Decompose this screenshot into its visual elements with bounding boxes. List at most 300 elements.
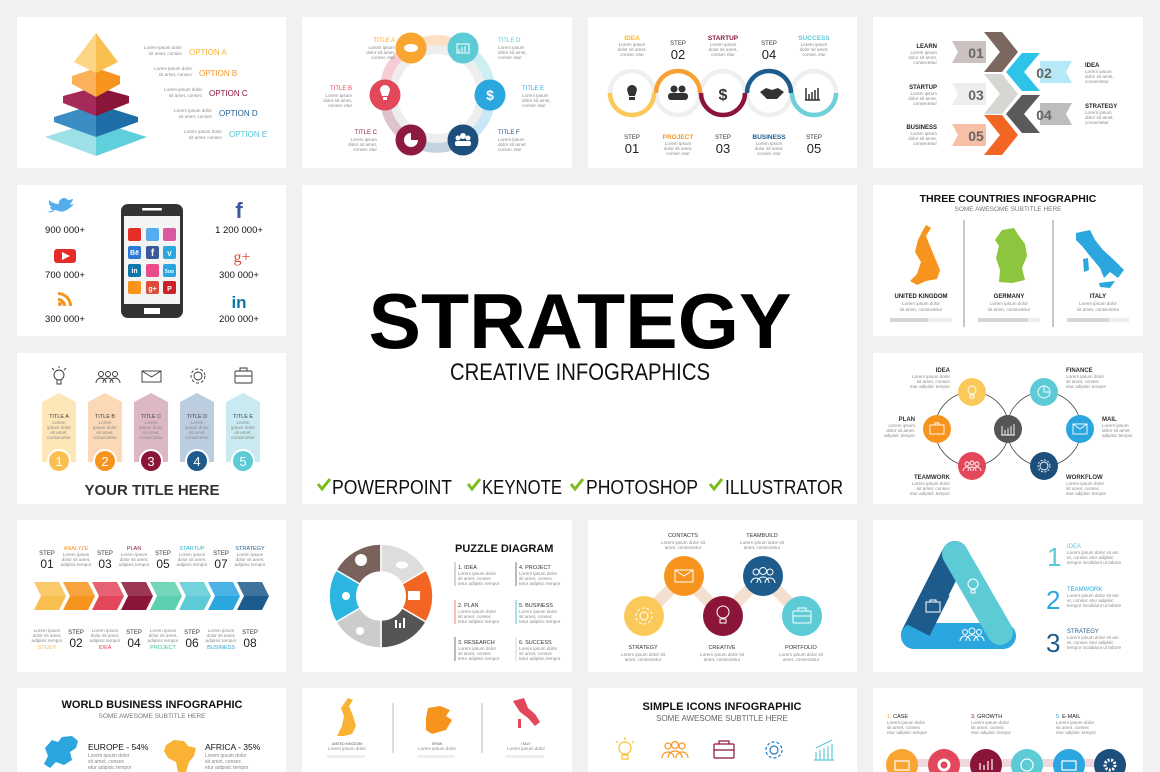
country labels: Lorem ipsum dolor — [1079, 301, 1117, 306]
puzzle legend: sit amet, consec — [519, 651, 553, 656]
line icons — [52, 366, 252, 384]
step labels: consec etur — [802, 52, 826, 57]
option labels: Lorem ipsum dolor — [184, 129, 222, 134]
subtitle: CREATIVE INFOGRAPHICS — [450, 359, 710, 386]
timeline labels: 3. GROWTH — [971, 714, 1002, 720]
social stats right: g+ — [233, 249, 251, 266]
numbered list: tempor incididunt ut labore — [1067, 603, 1122, 608]
step labels: Lorem ipsum — [121, 552, 147, 557]
puzzle legend: tetur adipisic tempor — [458, 619, 500, 624]
step labels: dolor sit amet, — [800, 47, 828, 52]
circle titles: consec etur — [498, 55, 522, 60]
pills: sit amet, — [188, 430, 206, 435]
pills: ipsum dolor — [231, 425, 255, 430]
country labels — [890, 294, 1129, 322]
pills: Lorem — [190, 420, 204, 425]
pills: 2 — [101, 454, 109, 469]
step labels: Lorem ipsum — [179, 552, 205, 557]
network labels: dolor sit amet, — [886, 428, 915, 433]
circle titles: consec etur — [498, 147, 522, 152]
panel: pyramid — [17, 17, 286, 168]
numbered list: IDEA — [1067, 544, 1081, 550]
chain labels — [621, 533, 824, 662]
pills: sit amet, — [50, 430, 68, 435]
step labels: 03 — [716, 141, 730, 156]
step labels: BUSINESS — [207, 645, 235, 651]
panel: simple icons — [588, 688, 857, 772]
step labels: 05 — [156, 557, 170, 571]
step labels: dolor sit amet, — [664, 146, 692, 151]
network labels: Lorem ipsum dolor — [1066, 481, 1105, 486]
pills: TITLE E — [233, 414, 253, 420]
step labels — [32, 546, 266, 651]
circle titles: dolor sit amet, — [348, 142, 377, 147]
chevron labels: dolor sit amet, — [1085, 115, 1114, 120]
phone — [121, 204, 183, 318]
timeline circles — [886, 749, 1126, 772]
puzzle legend: sit amet, consec — [519, 576, 553, 581]
chain labels: TEAMBUILD — [746, 533, 778, 539]
panel: country maps — [302, 688, 572, 772]
step labels: IDEA — [624, 35, 640, 42]
step labels: STARTUP — [708, 35, 739, 42]
ring diagram: $ — [486, 87, 494, 103]
chevron labels: Lorem ipsum — [910, 131, 937, 136]
pills: Lorem — [144, 420, 158, 425]
option labels: OPTION E — [229, 130, 267, 139]
puzzle legend: Lorem ipsum dolor — [458, 571, 497, 576]
circle titles: TITLE C — [355, 130, 378, 136]
step labels: STEP — [155, 551, 171, 557]
panel: main title — [302, 185, 857, 504]
chevron labels: dolor sit amet, — [1085, 74, 1114, 79]
heading: SIMPLE ICONS INFOGRAPHIC — [643, 701, 802, 713]
phone: 5oo — [165, 269, 174, 275]
europe stat: EUROPE - 54% — [88, 742, 149, 752]
step labels: STEP — [126, 630, 142, 636]
numbered list: Lorem ipsum dolor sit am — [1067, 550, 1119, 555]
pills: Lorem — [236, 420, 250, 425]
phone: Bē — [130, 250, 139, 257]
phone: g+ — [148, 286, 157, 293]
circle titles: TITLE A — [373, 38, 395, 44]
pills: consectetur — [185, 435, 209, 440]
pills: TITLE B — [95, 414, 115, 420]
chevron labels: dolor sit amet, — [908, 136, 937, 141]
puzzle legend — [455, 543, 561, 661]
circle titles: Lorem ipsum — [350, 137, 377, 142]
panel: social phone — [17, 185, 286, 336]
chevron labels: consectetur — [913, 141, 937, 146]
pills: ipsum dolor — [47, 425, 71, 430]
puzzle legend: 6. SUCCESS — [519, 640, 552, 646]
africa stat: Lorem ipsum dolor — [205, 753, 247, 759]
circle titles: Lorem ipsum — [368, 45, 395, 50]
social stats left — [45, 198, 85, 325]
europe stat: etur adipisic tempor — [88, 765, 132, 771]
chevron labels: BUSINESS — [906, 125, 937, 131]
step labels: dolor sit amet, — [62, 557, 90, 562]
chevron labels: consectetur — [913, 60, 937, 65]
option labels: OPTION B — [199, 69, 237, 78]
panel: three countries: SOME AWESOME SUBTITLE HERE — [954, 206, 1062, 213]
step labels: dolor sit amet, — [178, 557, 206, 562]
step labels: 01 — [625, 141, 639, 156]
numbered list: et, consec etur adipisic — [1067, 640, 1114, 645]
puzzle legend: Lorem ipsum dolor — [519, 571, 558, 576]
social stats right: 300 000+ — [219, 270, 259, 281]
network labels: sit amet, consec — [1066, 379, 1100, 384]
network labels: adipisic tempor — [1102, 433, 1133, 438]
option labels: OPTION C — [209, 89, 248, 98]
step labels: adipisic tempor — [177, 562, 208, 567]
puzzle legend: tetur adipisic tempor — [519, 619, 561, 624]
step labels: adipisic tempor — [148, 638, 179, 643]
country labels: Lorem ipsum dolor — [902, 301, 940, 306]
pills: consectetur — [139, 435, 163, 440]
step labels: dolor sit amet, — [91, 633, 119, 638]
network labels: sit amet, consec — [1066, 486, 1100, 491]
timeline labels: etur adipisic tempor — [971, 730, 1012, 735]
wave icons — [627, 85, 820, 104]
chain labels: amet, consectetur — [704, 657, 741, 662]
step labels: Lorem ipsum — [150, 628, 176, 633]
social stats right: 200 000+ — [219, 314, 259, 325]
step labels: dolor sit amet, — [207, 633, 235, 638]
chevron labels: dolor sit amet, — [908, 96, 937, 101]
puzzle ring — [329, 544, 433, 648]
option labels — [144, 45, 267, 140]
circle titles: Lorem ipsum — [325, 93, 352, 98]
circle titles: TITLE F — [498, 130, 520, 136]
step labels: dolor sit amet, — [709, 47, 737, 52]
chevron labels: IDEA — [1085, 63, 1100, 69]
chevron labels: Lorem ipsum — [1085, 110, 1112, 115]
circle titles: consec etur — [371, 55, 395, 60]
step labels: STEP — [715, 135, 731, 141]
circle network — [923, 378, 1094, 480]
puzzle legend: tetur adipisic tempor — [458, 581, 500, 586]
step labels: STEP — [184, 630, 200, 636]
puzzle legend: 2. PLAN — [458, 603, 479, 609]
europe stat — [88, 742, 149, 771]
network labels: MAIL — [1102, 417, 1117, 423]
country labels: sit amet, consectetur — [988, 307, 1031, 312]
africa stat: sit amet, consec — [205, 759, 242, 765]
step labels: adipisic tempor — [61, 562, 92, 567]
timeline labels: Lorem ipsum dolor — [971, 720, 1010, 725]
panel: puzzle diagram — [302, 520, 572, 672]
panel: steps wave — [588, 17, 857, 168]
step labels: Lorem ipsum — [92, 628, 118, 633]
network labels: Lorem ipsum — [1102, 423, 1129, 428]
option labels: OPTION D — [219, 109, 258, 118]
circle titles: dolor sit amet, — [498, 50, 527, 55]
chain labels: Lorem ipsum dolor sit — [621, 652, 666, 657]
network labels: IDEA — [936, 368, 951, 374]
step labels: dolor sit amet, — [755, 146, 783, 151]
puzzle legend: PUZZLE DIAGRAM — [455, 543, 553, 555]
numbered list: et, consec etur adipisic — [1067, 555, 1114, 560]
numbered list — [1046, 542, 1122, 658]
pills: 4 — [193, 454, 201, 469]
country labels: Lorem ipsum dolor — [990, 301, 1028, 306]
step labels: adipisic tempor — [32, 638, 63, 643]
network labels: Lorem ipsum dolor — [1066, 374, 1105, 379]
map: italy — [513, 698, 540, 726]
step labels: consec etur — [666, 151, 690, 156]
social stats right: 1 200 000+ — [215, 225, 263, 236]
chevrons: 03 — [968, 87, 984, 103]
chain labels: CREATIVE — [708, 645, 736, 651]
phone: P — [167, 286, 172, 293]
puzzle legend: Lorem ipsum dolor — [458, 609, 497, 614]
option labels: Lorem ipsum dolor — [174, 108, 212, 113]
step labels: 06 — [185, 636, 199, 650]
step labels: Lorem ipsum — [619, 42, 645, 47]
numbered list: 2 — [1046, 585, 1060, 615]
option labels: Lorem ipsum dolor — [164, 87, 202, 92]
circle titles: consec etur — [522, 103, 546, 108]
step labels: STARTUP — [179, 546, 205, 552]
map labels: Lorem ipsum dolor — [328, 746, 366, 751]
network labels: PLAN — [899, 417, 915, 423]
panel: world business: SOME AWESOME SUBTITLE HERE — [98, 713, 206, 720]
chevrons: 04 — [1036, 107, 1052, 123]
step labels: Lorem ipsum — [801, 42, 827, 47]
map: uk — [910, 225, 940, 285]
chain labels: amet, consectetur — [665, 545, 702, 550]
step labels: IDEA — [99, 645, 112, 651]
circle titles: TITLE B — [330, 86, 352, 92]
step labels: 01 — [40, 557, 54, 571]
timeline labels: 5. E-MAIL — [1056, 714, 1080, 720]
option labels: Lorem ipsum dolor — [154, 66, 192, 71]
step labels: consec etur — [711, 52, 735, 57]
pills: sit amet, — [142, 430, 160, 435]
numbered list: 1 — [1047, 542, 1061, 572]
step labels: BUSINESS — [752, 134, 786, 141]
puzzle legend: sit amet, consec — [458, 651, 492, 656]
step labels: consec etur — [757, 151, 781, 156]
chevron labels — [906, 44, 1117, 146]
outline icons — [616, 737, 834, 760]
pills: TITLE C — [141, 414, 161, 420]
chevron labels: consectetur — [913, 101, 937, 106]
circle titles: dolor sit amet, — [522, 98, 551, 103]
option labels: sit amet, consec — [179, 114, 213, 119]
network labels: Lorem ipsum dolor — [912, 374, 950, 379]
chevrons — [952, 32, 1072, 155]
step labels: 04 — [127, 636, 141, 650]
country labels: GERMANY — [994, 294, 1024, 300]
step labels: Lorem ipsum — [208, 628, 234, 633]
puzzle legend: sit amet, consec — [519, 614, 553, 619]
network labels — [884, 368, 1133, 496]
step labels: STEP — [39, 551, 55, 557]
chain labels: amet, consectetur — [783, 657, 820, 662]
step labels: 07 — [214, 557, 228, 571]
phone: V — [167, 251, 172, 258]
numbered list: Lorem ipsum dolor sit am — [1067, 635, 1119, 640]
puzzle legend: 4. PROJECT — [519, 565, 551, 571]
step labels: dolor sit amet, — [33, 633, 61, 638]
chevron labels: Lorem ipsum — [910, 91, 937, 96]
chain labels: Lorem ipsum dolor sit — [740, 540, 785, 545]
chevron labels: dolor sit amet, — [908, 55, 937, 60]
africa stat: etur adipisic tempor — [205, 765, 249, 771]
numbered list: tempor incididunt ut labore — [1067, 645, 1122, 650]
step labels: 04 — [762, 47, 776, 62]
pills: 1 — [55, 454, 63, 469]
map: africa — [164, 740, 196, 772]
puzzle legend: sit amet, consec — [458, 614, 492, 619]
numbered list: et, consec etur adipisic — [1067, 598, 1114, 603]
chevrons: 05 — [968, 128, 984, 144]
step labels: Lorem ipsum — [63, 552, 89, 557]
title: STRATEGY — [368, 277, 792, 365]
network labels: dolor sit amet, — [1102, 428, 1131, 433]
network labels: sit amet, consec — [917, 379, 951, 384]
map labels — [327, 742, 545, 758]
puzzle legend: tetur adipisic tempor — [458, 656, 500, 661]
step labels: Lorem ipsum — [756, 141, 782, 146]
numbered list: 3 — [1046, 628, 1060, 658]
panel: chevron steps — [873, 17, 1143, 168]
network labels: WORKFLOW — [1066, 475, 1103, 481]
country labels: sit amet, consectetur — [900, 307, 943, 312]
chevrons: 02 — [1036, 65, 1052, 81]
social stats left: 900 000+ — [45, 225, 85, 236]
chain labels: Lorem ipsum dolor sit — [779, 652, 824, 657]
step labels: 08 — [243, 636, 257, 650]
timeline labels: etur adipisic tempor — [1056, 730, 1097, 735]
compatibility list — [318, 477, 843, 499]
circle titles: consec etur — [353, 147, 377, 152]
option labels: sit amet, consec — [149, 51, 183, 56]
map labels: ITALY — [521, 742, 531, 746]
panel: world business — [17, 688, 286, 772]
pills: Lorem — [98, 420, 112, 425]
compatibility list: ILLUSTRATOR — [725, 477, 843, 499]
circle titles: TITLE D — [498, 38, 521, 44]
step labels: PROJECT — [663, 134, 693, 141]
social stats right — [215, 198, 263, 325]
step labels: dolor sit amet, — [149, 633, 177, 638]
option labels: OPTION A — [189, 48, 227, 57]
numbered list: tempor incididunt ut labore — [1067, 560, 1122, 565]
step labels: dolor sit amet, — [236, 557, 264, 562]
map: spain — [426, 706, 452, 734]
panel: six circles — [302, 17, 572, 168]
pills: TITLE A — [49, 414, 69, 420]
triangle icons — [926, 579, 984, 641]
chain labels: CONTACTS — [668, 533, 698, 539]
timeline labels: Lorem ipsum dolor — [887, 720, 926, 725]
timeline labels: sit amet, consec — [971, 725, 1005, 730]
pills: 5 — [239, 454, 247, 469]
panel: triangle — [873, 520, 1143, 672]
map labels: SPAIN — [432, 742, 443, 746]
panel: title pills — [17, 353, 286, 504]
step labels: Lorem ipsum — [237, 552, 263, 557]
numbered list: TEAMWORK — [1067, 587, 1102, 593]
pills: ipsum dolor — [139, 425, 163, 430]
timeline labels: sit amet, consec — [887, 725, 921, 730]
chevron labels: consectetur — [1085, 79, 1109, 84]
step labels: STEP — [68, 630, 84, 636]
heading: THREE COUNTRIES INFOGRAPHIC — [920, 193, 1097, 205]
wave icons: $ — [719, 87, 728, 104]
social stats left: 700 000+ — [45, 270, 85, 281]
pills: TITLE D — [187, 414, 207, 420]
step labels: SUCCESS — [798, 35, 830, 42]
network labels: etur adipisic tempor — [1066, 491, 1107, 496]
arrow band — [34, 582, 270, 610]
chain labels: amet, consectetur — [625, 657, 662, 662]
step labels: 02 — [69, 636, 83, 650]
country labels: sit amet, consectetur — [1077, 307, 1120, 312]
africa stat: AFRICA - 35% — [205, 742, 261, 752]
puzzle legend: 3. RESEARCH — [458, 640, 495, 646]
step labels: STRATEGY — [235, 546, 265, 552]
step labels: STEP — [806, 135, 822, 141]
pills: ipsum dolor — [93, 425, 117, 430]
compatibility list: KEYNOTE — [482, 477, 562, 499]
option labels: sit amet, consec — [159, 72, 193, 77]
map labels: Lorem ipsum dolor — [418, 746, 456, 751]
chevron labels: Lorem ipsum — [1085, 69, 1112, 74]
chain labels: PORTFOLIO — [785, 645, 818, 651]
chevron labels: Lorem ipsum — [910, 50, 937, 55]
map: germany — [995, 228, 1027, 283]
step labels: Lorem ipsum — [710, 42, 736, 47]
social stats right: in — [231, 293, 247, 312]
chain labels: amet, consectetur — [744, 545, 781, 550]
puzzle legend: sit amet, consec — [458, 576, 492, 581]
pills: ipsum dolor — [185, 425, 209, 430]
map labels: Lorem ipsum dolor — [507, 746, 545, 751]
step labels — [618, 35, 830, 156]
numbered list: STRATEGY — [1067, 629, 1099, 635]
step labels: STEP — [242, 630, 258, 636]
network labels: FINANCE — [1066, 368, 1093, 374]
timeline labels: Lorem ipsum dolor — [1056, 720, 1095, 725]
map: uk — [337, 698, 356, 736]
step labels: Lorem ipsum — [34, 628, 60, 633]
circle titles: dolor sit amet, — [366, 50, 395, 55]
step labels: PLAN — [127, 546, 141, 552]
puzzle icons — [342, 554, 420, 635]
panel: simple icons: SOME AWESOME SUBTITLE HERE — [656, 714, 788, 723]
step labels: 02 — [671, 47, 685, 62]
puzzle legend: Lorem ipsum dolor — [458, 646, 497, 651]
circle titles: Lorem ipsum — [498, 45, 525, 50]
pills: sit amet, — [96, 430, 114, 435]
step labels: STEP — [213, 551, 229, 557]
step labels: adipisic tempor — [235, 562, 266, 567]
step labels: adipisic tempor — [90, 638, 121, 643]
timeline labels: sit amet, consec — [1056, 725, 1090, 730]
step labels: ANALYZE — [64, 546, 89, 552]
network labels: TEAMWORK — [914, 475, 951, 481]
pills — [42, 393, 260, 473]
step labels: dolor sit amet, — [120, 557, 148, 562]
panel: three countries — [873, 185, 1143, 336]
puzzle legend: Lorem ipsum dolor — [519, 609, 558, 614]
circle titles: TITLE E — [522, 86, 544, 92]
numbered list: Lorem ipsum dolor sit am — [1067, 593, 1119, 598]
